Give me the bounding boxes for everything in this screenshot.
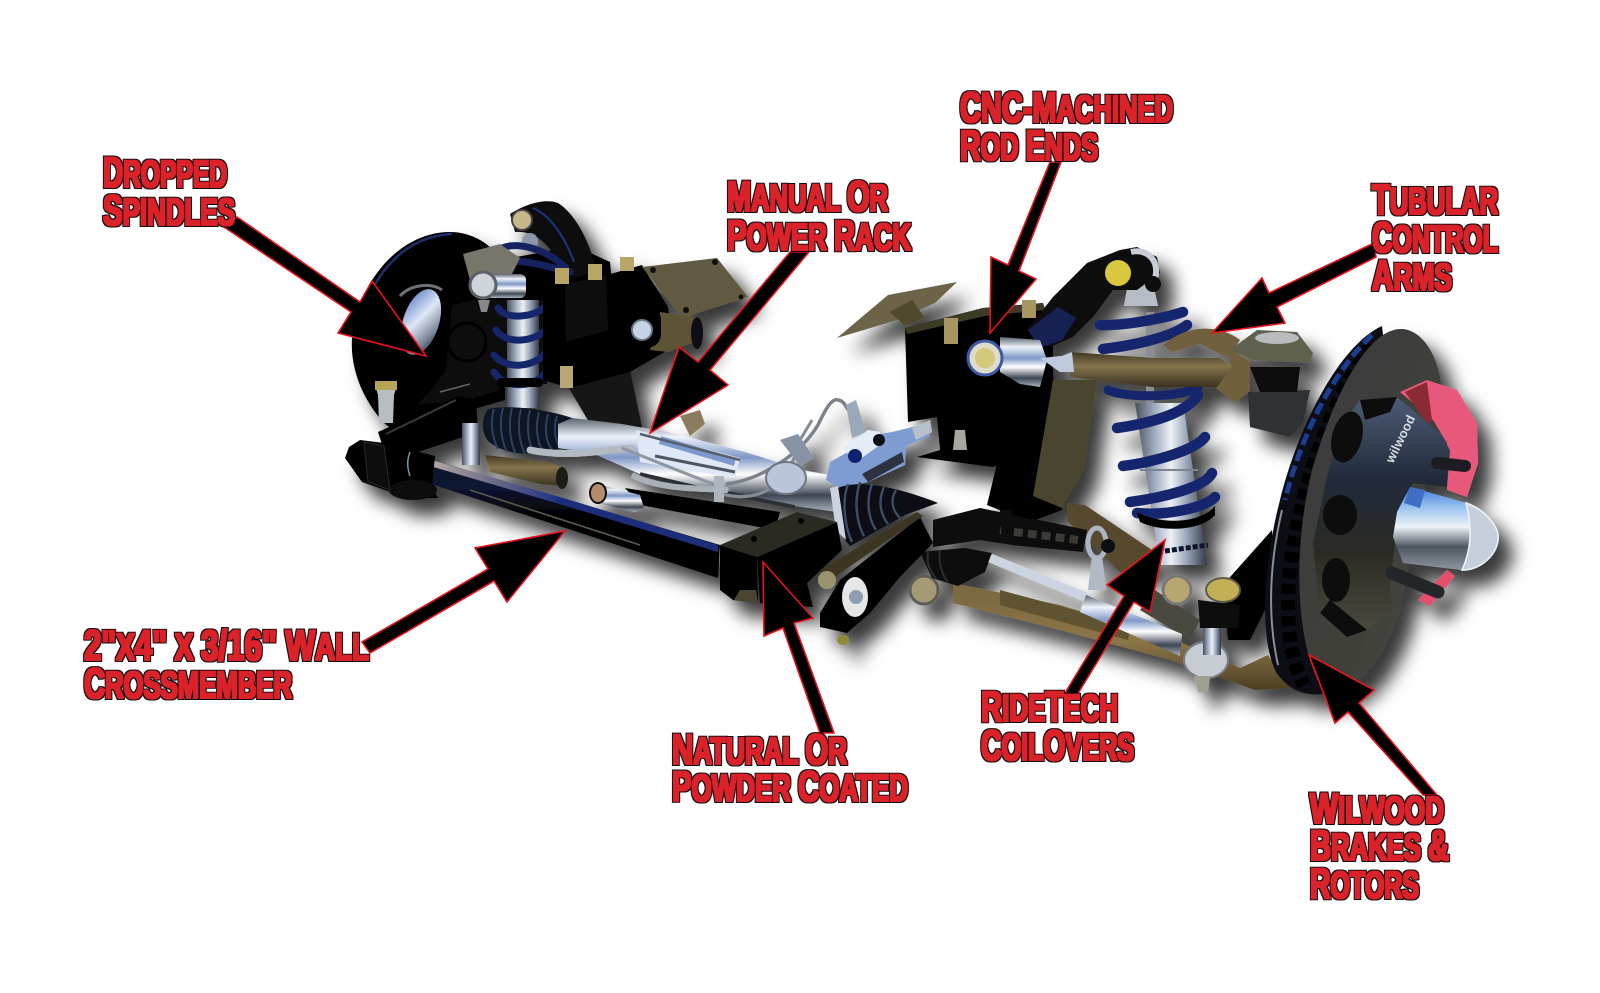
right coilover spring <box>1100 312 1215 514</box>
right lower strap arm <box>933 508 1087 552</box>
right rotor face <box>1299 329 1442 694</box>
label: dropped spindles: DROPPED <box>103 149 227 197</box>
left spindle plate <box>418 296 500 404</box>
label: wilwood: WILWOOD <box>1310 785 1444 833</box>
chrome hub and dust cap <box>1393 487 1498 570</box>
rear crossmember bar behind the rack <box>625 488 780 530</box>
center post <box>987 373 1097 522</box>
arrow: natural or powder coated <box>763 562 834 733</box>
right outer bracket with washer <box>818 512 933 645</box>
label: manual or: MANUAL OR <box>727 173 888 221</box>
left lower arm <box>378 396 480 465</box>
label: power rack: POWER RACK <box>727 212 911 260</box>
right lower black A-arm <box>1223 530 1275 640</box>
chrome tie rod sleeve <box>1080 595 1182 656</box>
chrome bushing <box>590 483 644 512</box>
center frame bracket with engine mount plate <box>837 282 1053 467</box>
arrow: dropped spindles <box>224 217 426 356</box>
arrow: Wilwood brakes <box>1309 655 1437 795</box>
tubular control arm <box>1070 329 1250 402</box>
right brake rotor back and vents <box>1265 326 1402 694</box>
rotor hat wilwood logo text: wilwood <box>1382 413 1418 466</box>
label: powder coated: POWDER COATED <box>672 763 908 811</box>
bottom coil collar <box>1137 506 1215 529</box>
label: crossmember: CROSSMEMBER <box>84 660 292 708</box>
lower tan strut behind coil <box>1067 503 1155 572</box>
lower boot and inner tie rod <box>920 548 1088 598</box>
chrome valve body <box>826 400 932 488</box>
label: control: CONTROL <box>1372 214 1498 262</box>
small rod end on tie rod <box>1088 528 1115 590</box>
arrow: manual or power rack <box>650 252 809 433</box>
upper curved arm <box>1027 247 1161 348</box>
chrome steering rack <box>530 400 850 512</box>
tan bushing tube <box>485 410 705 489</box>
label: brakes and: BRAKES & <box>1310 822 1449 870</box>
left post <box>567 370 643 432</box>
steering boot, left <box>483 407 578 454</box>
label: CNC-machined: CNC-MACHINED <box>960 84 1173 132</box>
label: 2x4 wall: 2"X4" X 3/16" WALL <box>84 622 369 670</box>
steering boot, right <box>830 482 938 546</box>
left brake rotor <box>352 232 505 432</box>
label: spindles line: SPINDLES <box>103 187 235 235</box>
black rotor hat <box>1313 397 1450 637</box>
left upper black backing <box>490 246 612 305</box>
label: natural or: NATURAL OR <box>672 726 847 774</box>
label: rod ends: ROD ENDS <box>960 122 1098 170</box>
left upper control arm <box>510 201 596 280</box>
left frame bracket <box>375 257 748 423</box>
tan lower control arm <box>910 576 1290 690</box>
left upper chrome mount <box>463 244 526 312</box>
arrow: tubular control arms <box>1212 243 1376 333</box>
coilover lower mount bolt <box>1163 576 1191 604</box>
label: rotors: ROTORS <box>1310 860 1419 908</box>
label: coilovers: COILOVERS <box>981 722 1134 770</box>
arrow: RideTech coilovers <box>1065 540 1165 695</box>
crossmember right box <box>720 512 842 607</box>
wheel studs <box>1392 463 1465 592</box>
arrow: CNC rod ends <box>990 162 1061 333</box>
left coilover <box>487 246 570 408</box>
label: ridetech: RIDETECH <box>981 683 1118 731</box>
right coilover shock body <box>1135 403 1208 565</box>
outer rod end and bolt <box>1184 578 1240 692</box>
arrow: crossmember <box>362 531 565 653</box>
main crossmember tube <box>428 460 720 578</box>
label: arms: ARMS <box>1372 252 1452 300</box>
right coilover back coils <box>1108 283 1198 405</box>
crossmember left end block <box>345 440 438 500</box>
pink brake caliper <box>1400 380 1478 606</box>
ball joint and bracket <box>1230 330 1313 437</box>
label: tubular: TUBULAR <box>1372 176 1498 224</box>
suspension assembly photo <box>345 201 1498 694</box>
rod end <box>968 337 1074 387</box>
